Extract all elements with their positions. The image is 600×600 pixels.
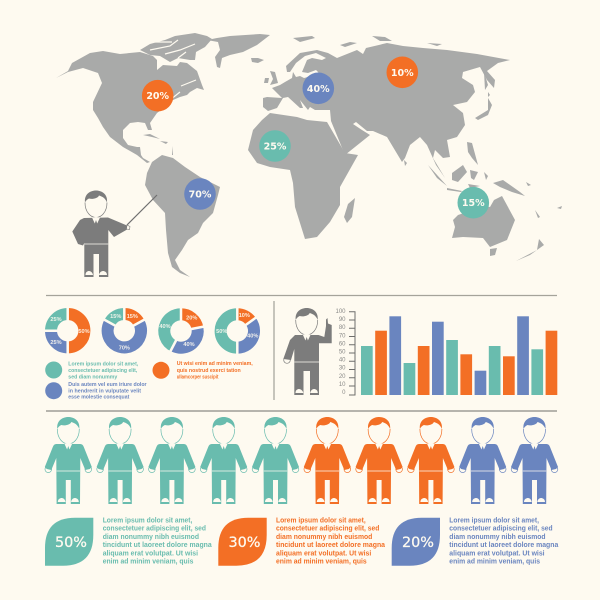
legend: teal item: consectetuer adipiscing elit, [68,368,138,374]
bar chart axis: 10 [339,382,346,388]
donut chart 1: 25% [50,317,62,323]
text block: orange: tincidunt ut laoreet dolore magna [276,542,385,549]
legend: teal item: Lorem ipsum dolor sit amet, [68,361,139,367]
map: Eurasia [263,43,510,178]
bar chart axis: 80 [339,325,346,331]
legend: blue item: Duis autem vel eum iriure dolor [68,382,147,388]
text block: teal [103,517,212,566]
donut chart 2: 70% [119,346,130,352]
person 4 teal [200,417,247,504]
person 5 teal [252,417,299,504]
donut chart 4: 50% [216,329,227,335]
map: Sulawesi and Moluccas [468,170,488,188]
map: South America [145,155,220,277]
Arctic channels and gulfs cut out of the map [150,40,196,100]
percentage bubble: 10%: 10% [391,68,414,79]
map: New Zealand [516,239,544,261]
legend: blue item: esse molestie consequat [68,395,129,401]
donut chart 1 [44,307,90,355]
text block: blue [449,517,558,566]
person 9 blue [459,417,506,504]
text block: teal: tincidunt ut laoreet dolore magna [103,542,212,549]
world map [56,33,562,277]
percentage bubble: 40% [302,72,334,104]
divider: second rule [46,410,557,412]
person 10 blue [511,417,558,504]
text block: blue: diam nonummy nibh euismod [449,534,546,541]
donut chart 3: 40% [183,342,195,348]
percentage bubble: 10% [386,57,418,88]
donut chart 4 [214,307,261,355]
map: British Isles [264,71,278,85]
donut chart 2: 15% [110,314,121,320]
bar chart axis: 70 [339,333,346,339]
text block: blue: tincidunt ut laoreet dolore magna [449,542,558,549]
stat badge: 30%: 30% [228,535,260,551]
bar chart axis: 30 [339,366,346,372]
person 7 orange [356,417,403,504]
bar chart axis: 20 [339,374,346,380]
percentage bubble: 40%: 40% [307,84,330,95]
person 8 orange [407,417,454,504]
donut chart 4: 10% [239,313,250,319]
map: Africa [248,113,358,239]
legend: orange item: quis nostrud exerci tation [177,368,241,374]
text block: blue: consectetuer adipiscing elit, sed [449,526,553,533]
person 2 teal [97,417,144,504]
text block: teal: Lorem ipsum dolor sit amet, [103,517,192,524]
legend: teal item: sed diam nonummy [68,374,118,380]
percentage bubble: 20%: 20% [146,91,170,102]
map: Sakhalin [484,72,488,90]
legend: blue item [45,382,147,401]
donut chart 2: 15% [127,314,138,320]
map: Iceland [251,58,264,63]
bar chart axis: 50 [339,350,346,356]
person 1 teal [45,417,92,504]
stat badge: 20% [392,518,440,566]
person 6 orange [304,417,351,504]
text block: teal: aliquam erat volutpat. Ut wisi [103,550,198,557]
text block: blue: aliquam erat volutpat. Ut wisi [449,550,545,557]
donut chart 3: 40% [159,324,171,330]
percentage bubble: 15%: 15% [462,198,485,209]
text block: orange [276,517,385,566]
text block: orange: Lorem ipsum dolor sit amet, [276,517,366,524]
donut chart 2 [102,307,147,353]
percentage bubble: 70%: 70% [189,190,212,200]
map: North America [56,51,204,163]
pointer stick [127,195,157,225]
stat badge: 50% [45,518,93,566]
map: Australia [452,196,515,247]
percentage bubble: 70% [184,178,216,210]
bar chart axis: 40 [339,358,346,364]
map: Borneo [452,165,467,182]
donut chart 1: 50% [78,329,90,335]
map: Arctic islands [140,33,212,62]
text block: teal: enim ad minim veniam, quis [103,559,194,566]
percentage bubble: 15% [458,187,489,218]
divider: top rule [46,294,557,296]
bar chart axis: 100 [335,309,346,315]
stat badge: 20%: 20% [402,535,434,551]
legend: orange item [152,361,253,380]
percentage bubble: 25%: 25% [264,142,287,152]
map: New Guinea [493,180,525,196]
figure: presenter raising a finger [283,308,332,395]
text block: orange: consectetuer adipiscing elit, sed [276,526,379,533]
donut chart 1: 25% [50,340,62,346]
text block: orange: diam nonummy nibh euismod [276,534,372,541]
bar chart axis [335,309,355,396]
text block: blue: Lorem ipsum dolor sit amet, [449,517,539,524]
legend: blue item: in hendrerit in vulputate velit [68,388,141,394]
text block: teal: diam nonummy nibh euismod [103,534,199,541]
bar chart axis: 60 [339,341,346,347]
stat badge: 50%: 50% [55,535,87,551]
map: Arctic Russia islands [293,36,442,47]
divider: vertical rule [273,301,275,400]
text block: blue: enim ad minim veniam, quis [449,559,540,566]
map: Pacific islands [526,182,562,218]
map: Tasmania [490,248,497,256]
map: Sumatra and Java [428,165,462,192]
percentage bubble: 25% [259,130,291,162]
text block: orange: enim ad minim veniam, quis [276,559,367,566]
map: Greenland [207,34,270,68]
figure: man with pointer [72,190,157,277]
legend: orange item: ullamcorper suscipit [177,374,218,380]
donut chart 4: 40% [247,334,258,340]
bar chart [361,316,557,395]
donut chart 3: 20% [186,316,197,322]
map: Cuba and Caribbean [143,134,173,155]
legend: teal item [45,361,139,380]
donut chart 3 [159,307,205,353]
map: Japan [475,92,492,120]
text block: teal: consectetuer adipiscing elit, sed [103,526,206,533]
map: Sri Lanka [404,160,407,166]
people row: 5 teal, 3 orange, 2 blue [45,417,558,504]
stat badge: 30% [218,518,267,566]
bar chart axis: 90 [339,317,346,323]
percentage bubble: 20% [142,80,174,111]
legend: orange item: Ut wisi enim ad minim veniam, [177,361,253,367]
person 3 teal [148,417,195,504]
text block: orange: aliquam erat volutpat. Ut wisi [276,550,371,557]
bar chart axis: 0 [342,390,346,396]
map: Philippines [467,142,478,165]
map: Madagascar [344,198,355,223]
